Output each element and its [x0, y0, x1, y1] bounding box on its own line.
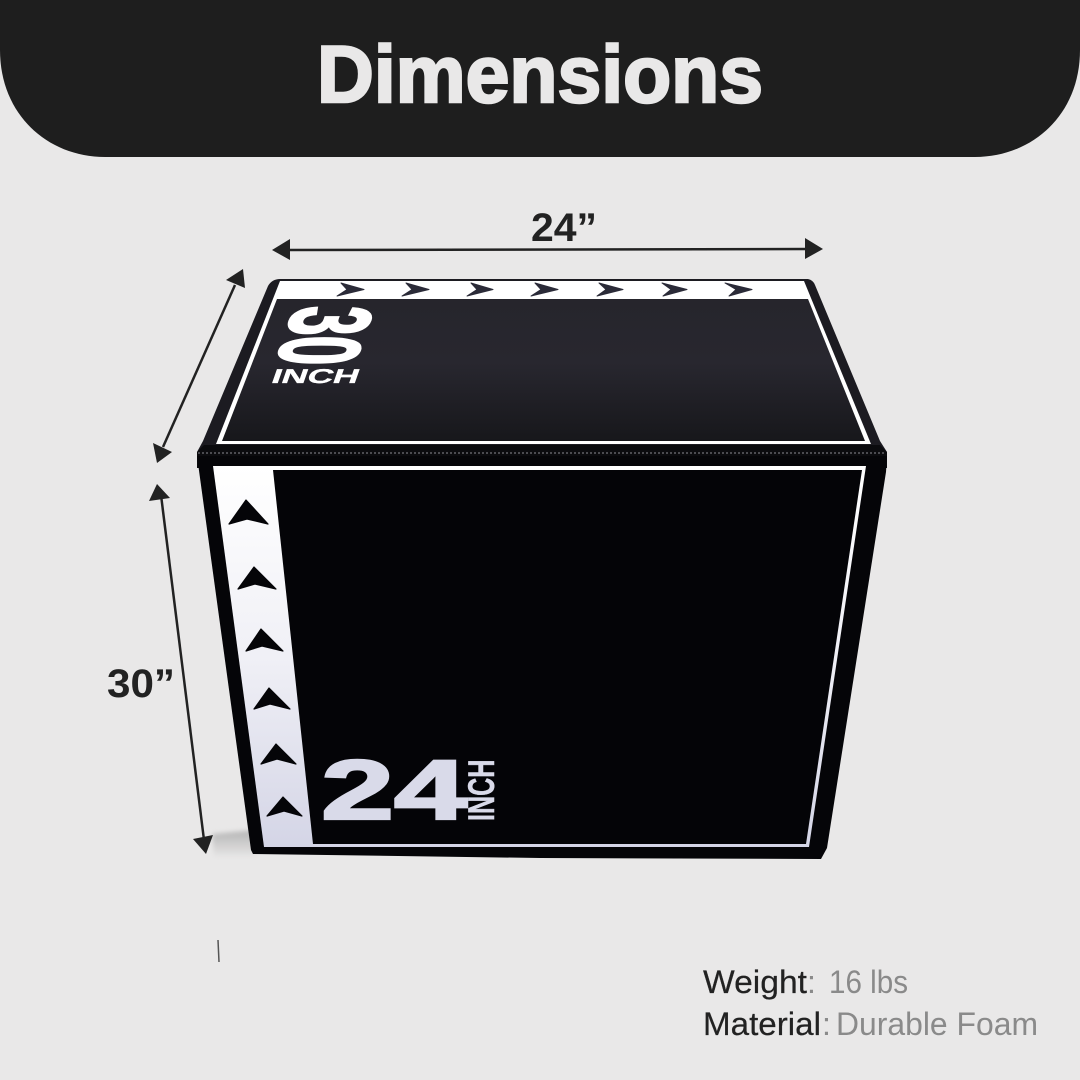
weight: [703, 964, 908, 1000]
label: 24 inch: INCH: [460, 760, 502, 821]
front face: [197, 456, 887, 859]
top face: [197, 279, 887, 452]
small mark: [218, 940, 219, 962]
depth arrow: [153, 269, 245, 463]
label: 30 inch: 30: [250, 306, 397, 365]
material: Material: [703, 1006, 821, 1042]
material: [703, 1006, 1038, 1042]
material: Durable Foam: [836, 1006, 1038, 1042]
height label: 30”: [107, 662, 175, 706]
width arrow: 24 in: [272, 206, 823, 260]
weight: 16 lbs: [829, 964, 908, 1000]
seam band: [197, 445, 887, 468]
label: 30 inch: INCH: [268, 365, 363, 388]
weight: Weight: [703, 964, 807, 1000]
title: Dimensions: [317, 30, 763, 120]
plyo box: [197, 279, 887, 859]
specifications: [703, 964, 1038, 1042]
weight: :: [807, 964, 816, 1000]
material: :: [822, 1006, 831, 1042]
width label: 24”: [531, 206, 597, 250]
top arrows strip: [337, 283, 752, 296]
floor shadow: [212, 830, 258, 858]
up arrows strip: [229, 500, 302, 816]
header banner: [0, 0, 1080, 157]
label: 24 inch: 24: [321, 743, 467, 837]
height arrow: 30 in: [107, 484, 213, 854]
